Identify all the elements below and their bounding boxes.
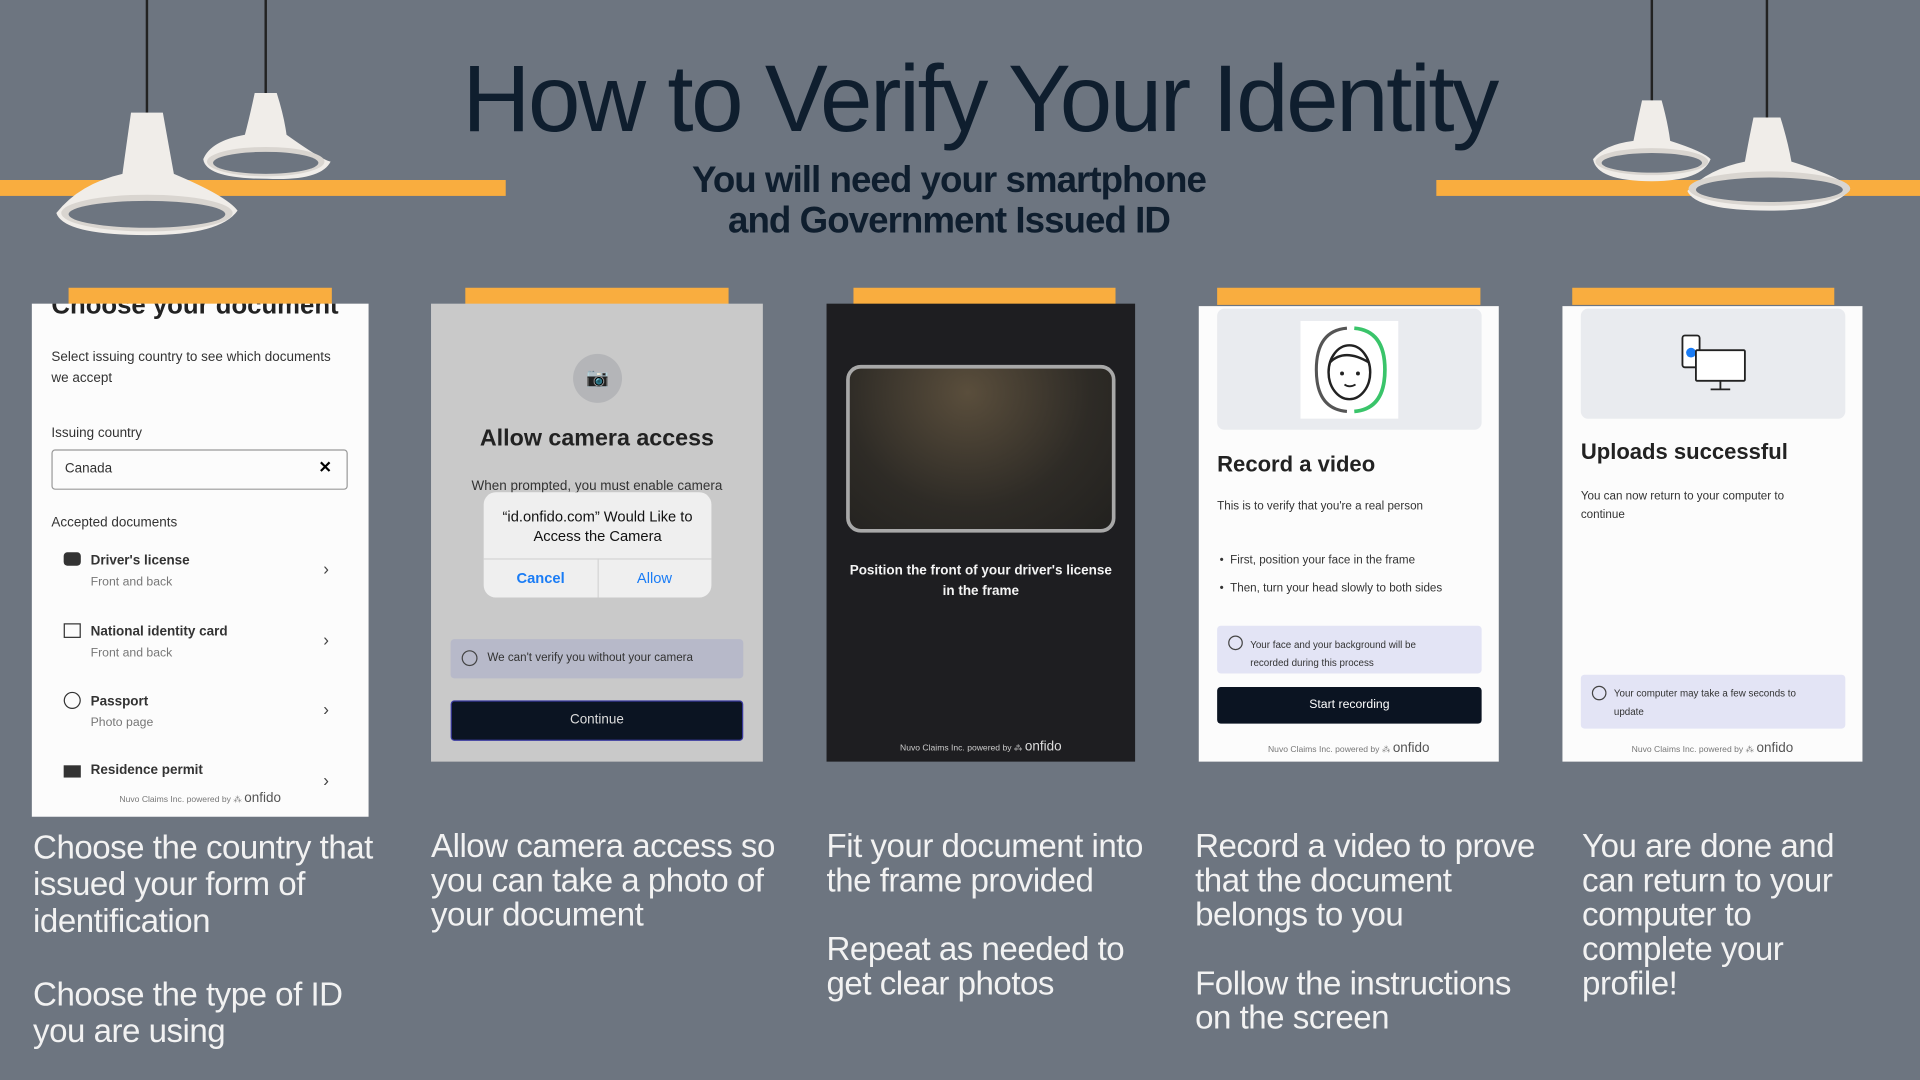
orange shelf bars — [0, 180, 506, 196]
panel 1: choose document: Photo page — [91, 716, 153, 730]
panel 1: choose document: Front and back — [91, 647, 172, 660]
panel 5: uploads successful: Nuvo Claims Inc. powered by ⁂ onfido — [1632, 741, 1793, 756]
panel 1: choose document: › — [323, 629, 329, 649]
subtitle: and Government Issued ID — [728, 201, 1170, 241]
panel 4: record video: • Then, turn your head slowly to both sides — [1220, 582, 1442, 595]
caption 1: issued your form of — [33, 866, 305, 902]
icon: face — [1300, 321, 1398, 418]
caption 3: get clear photos — [827, 965, 1054, 1002]
panel 4: record video: • First, position your face in the frame — [1220, 553, 1415, 567]
panel 1: choose document: Driver's license — [91, 553, 190, 568]
caption 2 — [431, 828, 775, 933]
panel 4: record video: Your face and your background will be — [1250, 639, 1416, 650]
panel 2: camera access: Access the Camera — [533, 528, 662, 545]
panel 3: document frame: Position the front of your driver's license — [850, 563, 1112, 578]
panel 2: camera access: Allow — [637, 569, 672, 587]
subtitle — [692, 160, 1206, 241]
caption 5: computer to — [1582, 896, 1751, 933]
caption 2: Allow camera access so — [431, 828, 775, 864]
panel 4: record video: Record a video — [1217, 452, 1375, 476]
panel 4 tab — [1217, 288, 1480, 305]
panel 3: document frame: in the frame — [943, 584, 1019, 599]
panel 5: uploads successful: Uploads successful — [1581, 440, 1788, 464]
panel 1: choose document — [32, 304, 369, 817]
caption 2: you can take a photo of — [431, 862, 763, 899]
panel 3 tab — [853, 288, 1116, 305]
panel 5: uploads successful: update — [1614, 707, 1644, 718]
caption 4 — [1195, 828, 1535, 1036]
panel 2 tab — [465, 288, 729, 305]
caption 5: complete your — [1582, 931, 1783, 967]
panel 1: choose document: ✕ — [318, 458, 332, 476]
panel 1: choose document: Front and back — [91, 576, 172, 589]
panel 4: record video: Start recording — [1309, 698, 1390, 711]
panel 1 tab — [69, 288, 332, 305]
caption 3: the frame provided — [827, 862, 1093, 899]
panel 1: choose document: › — [323, 699, 329, 719]
caption 2: your document — [431, 896, 643, 933]
caption 3 — [827, 828, 1143, 1002]
lamp: left big — [56, 0, 238, 235]
caption 1: you are using — [33, 1013, 225, 1049]
panel 1: choose document: Accepted documents — [51, 516, 177, 530]
panel 4: record video: recorded during this process — [1250, 658, 1374, 669]
panel 2: camera access: Allow camera access — [480, 426, 714, 452]
panel 5: uploads successful: You can now return to your computer to — [1581, 490, 1784, 503]
panel 1: choose document: Canada — [65, 462, 112, 476]
panel 5: uploads successful — [1562, 306, 1862, 762]
caption 4: belongs to you — [1195, 896, 1403, 933]
panel 2: camera access: Cancel — [517, 569, 565, 587]
panel 1: choose document: Residence permit — [91, 763, 203, 778]
caption 4: on the screen — [1195, 999, 1389, 1036]
panel 2: camera access: When prompted, you must enable camera — [472, 479, 722, 493]
caption 1: Choose the type of ID — [33, 976, 343, 1013]
panel 2: camera access: 📷 — [586, 367, 609, 388]
panel 3: document frame — [827, 304, 1135, 762]
panel 1: choose document: › — [323, 770, 329, 790]
panel 1: choose document: Passport — [91, 694, 148, 709]
panel 4: record video: This is to verify that you're a real person — [1217, 500, 1423, 513]
caption 5 — [1582, 828, 1834, 1002]
panel 5: uploads successful: Your computer may take a few seconds to — [1614, 688, 1796, 699]
caption 5: can return to your — [1582, 862, 1832, 899]
panel 2: camera access: “id.onfido.com” Would Like to — [503, 508, 693, 525]
caption 5: profile! — [1582, 965, 1677, 1002]
lamp: left small — [203, 0, 331, 179]
caption 3: Repeat as needed to — [827, 931, 1124, 967]
panel 5: uploads successful: continue — [1581, 508, 1625, 522]
caption 4: Record a video to prove — [1195, 828, 1535, 864]
panel 2: camera access — [431, 304, 763, 762]
caption 1 — [33, 829, 374, 1049]
lamp: right big — [1687, 0, 1850, 211]
panel 5 tab — [1572, 288, 1834, 305]
caption 5: You are done and — [1582, 828, 1834, 864]
panel 1: choose document: Nuvo Claims Inc. powered by ⁂ onfido — [119, 791, 281, 806]
panel 1: choose document: Issuing country — [51, 426, 142, 441]
panel 4: record video: Nuvo Claims Inc. powered by ⁂ onfido — [1268, 741, 1430, 756]
panel 1: choose document: we accept — [51, 371, 112, 386]
caption 3: Fit your document into — [827, 828, 1143, 864]
subtitle: You will need your smartphone — [692, 160, 1206, 201]
panel 4: record video — [1199, 306, 1499, 762]
caption 4: Follow the instructions — [1195, 965, 1511, 1002]
panel 1: choose document: Select issuing country to see which documents — [51, 350, 331, 365]
lamps — [56, 0, 1850, 236]
caption 4: that the document — [1195, 862, 1451, 899]
icon: devices — [1682, 334, 1746, 390]
panel 1: choose document: › — [323, 558, 329, 578]
title: How to Verify Your Identity — [462, 47, 1497, 152]
caption 1: Choose the country that — [33, 829, 373, 866]
panel 3: document frame: Nuvo Claims Inc. powered by ⁂ onfido — [900, 740, 1062, 754]
panel 2: camera access: Continue — [570, 713, 624, 727]
caption 1: identification — [33, 902, 210, 939]
panel 1: choose document: National identity card — [91, 624, 228, 639]
lamp: right small — [1593, 0, 1711, 181]
panel 2: camera access: We can't verify you without your camera — [487, 651, 693, 665]
